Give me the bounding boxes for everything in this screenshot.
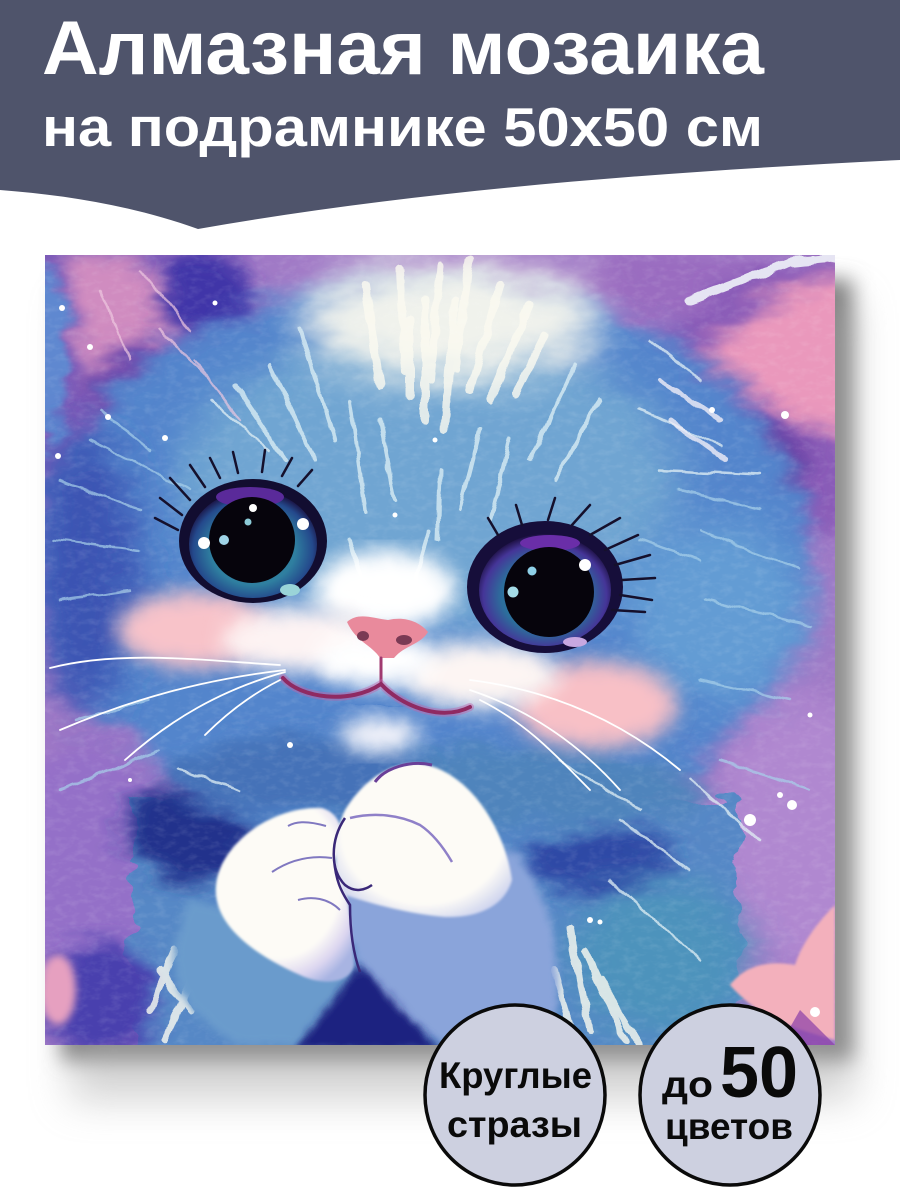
left ear [45,255,266,478]
badge: round rhinestones: стразы [447,1104,582,1145]
left eye [179,479,327,603]
left paw [216,808,354,982]
body fur [45,780,750,1080]
right ear [654,255,835,538]
head fur [35,258,810,845]
pink flower [40,905,835,1045]
title: Алмазная мозаика [42,6,765,91]
painting background [45,255,835,1045]
badge: up to 50 colours: цветов [665,1106,793,1147]
whiskers [50,658,680,790]
paint sparkles [55,300,820,1017]
pink cheeks and white muzzle [117,550,677,753]
mouth [283,658,470,713]
right eye [467,521,623,653]
badge: round rhinestones: Круглые [439,1055,592,1096]
eyelashes [155,450,655,612]
lower arms [174,850,557,1050]
nose [347,616,428,658]
badge: up to 50 colours: 50 [720,1033,798,1113]
canvas shadow [62,280,855,1100]
fur strokes [55,258,835,1045]
badge: up to 50 colours: до [662,1064,713,1105]
canvas texture [45,255,835,1045]
painting: blue kitten [45,255,835,1045]
subtitle: на подрамнике 50х50 см [42,96,763,158]
painted colour fields [45,255,835,1045]
badge: round rhinestones [425,1005,605,1185]
banner [0,0,900,229]
badge: up to 50 colours [640,1005,820,1185]
right paw [334,763,512,972]
